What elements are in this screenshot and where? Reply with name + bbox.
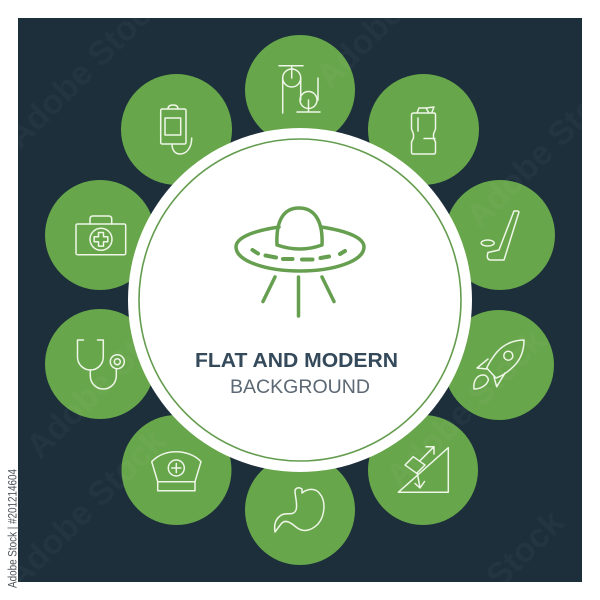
green icon circles <box>45 35 555 565</box>
icon: pulley <box>279 66 320 113</box>
watermark: Adobe Stock <box>19 292 193 466</box>
icon: water bottle <box>412 107 436 154</box>
stock id side label: Adobe Stock | #201214604 <box>8 468 20 588</box>
icon: first aid kit <box>76 216 126 255</box>
watermark: Stock <box>479 503 571 596</box>
watermark: Adobe Stock <box>0 422 173 596</box>
central green ring <box>139 139 461 461</box>
icon: inclined plane <box>398 447 448 492</box>
icon: hockey stick and puck <box>481 211 519 260</box>
central white circle <box>128 128 472 472</box>
icon: ufo <box>236 208 364 316</box>
icon: stethoscope <box>78 340 124 389</box>
icon: rocket <box>474 340 524 389</box>
icon: nurse cap <box>152 452 201 491</box>
watermark: Adobe Stock <box>379 322 553 496</box>
heading: FLAT AND MODERN <box>195 350 398 372</box>
subheading: BACKGROUND <box>230 376 370 398</box>
icon: iv drip bag <box>161 105 192 154</box>
icon: stomach <box>275 488 324 532</box>
